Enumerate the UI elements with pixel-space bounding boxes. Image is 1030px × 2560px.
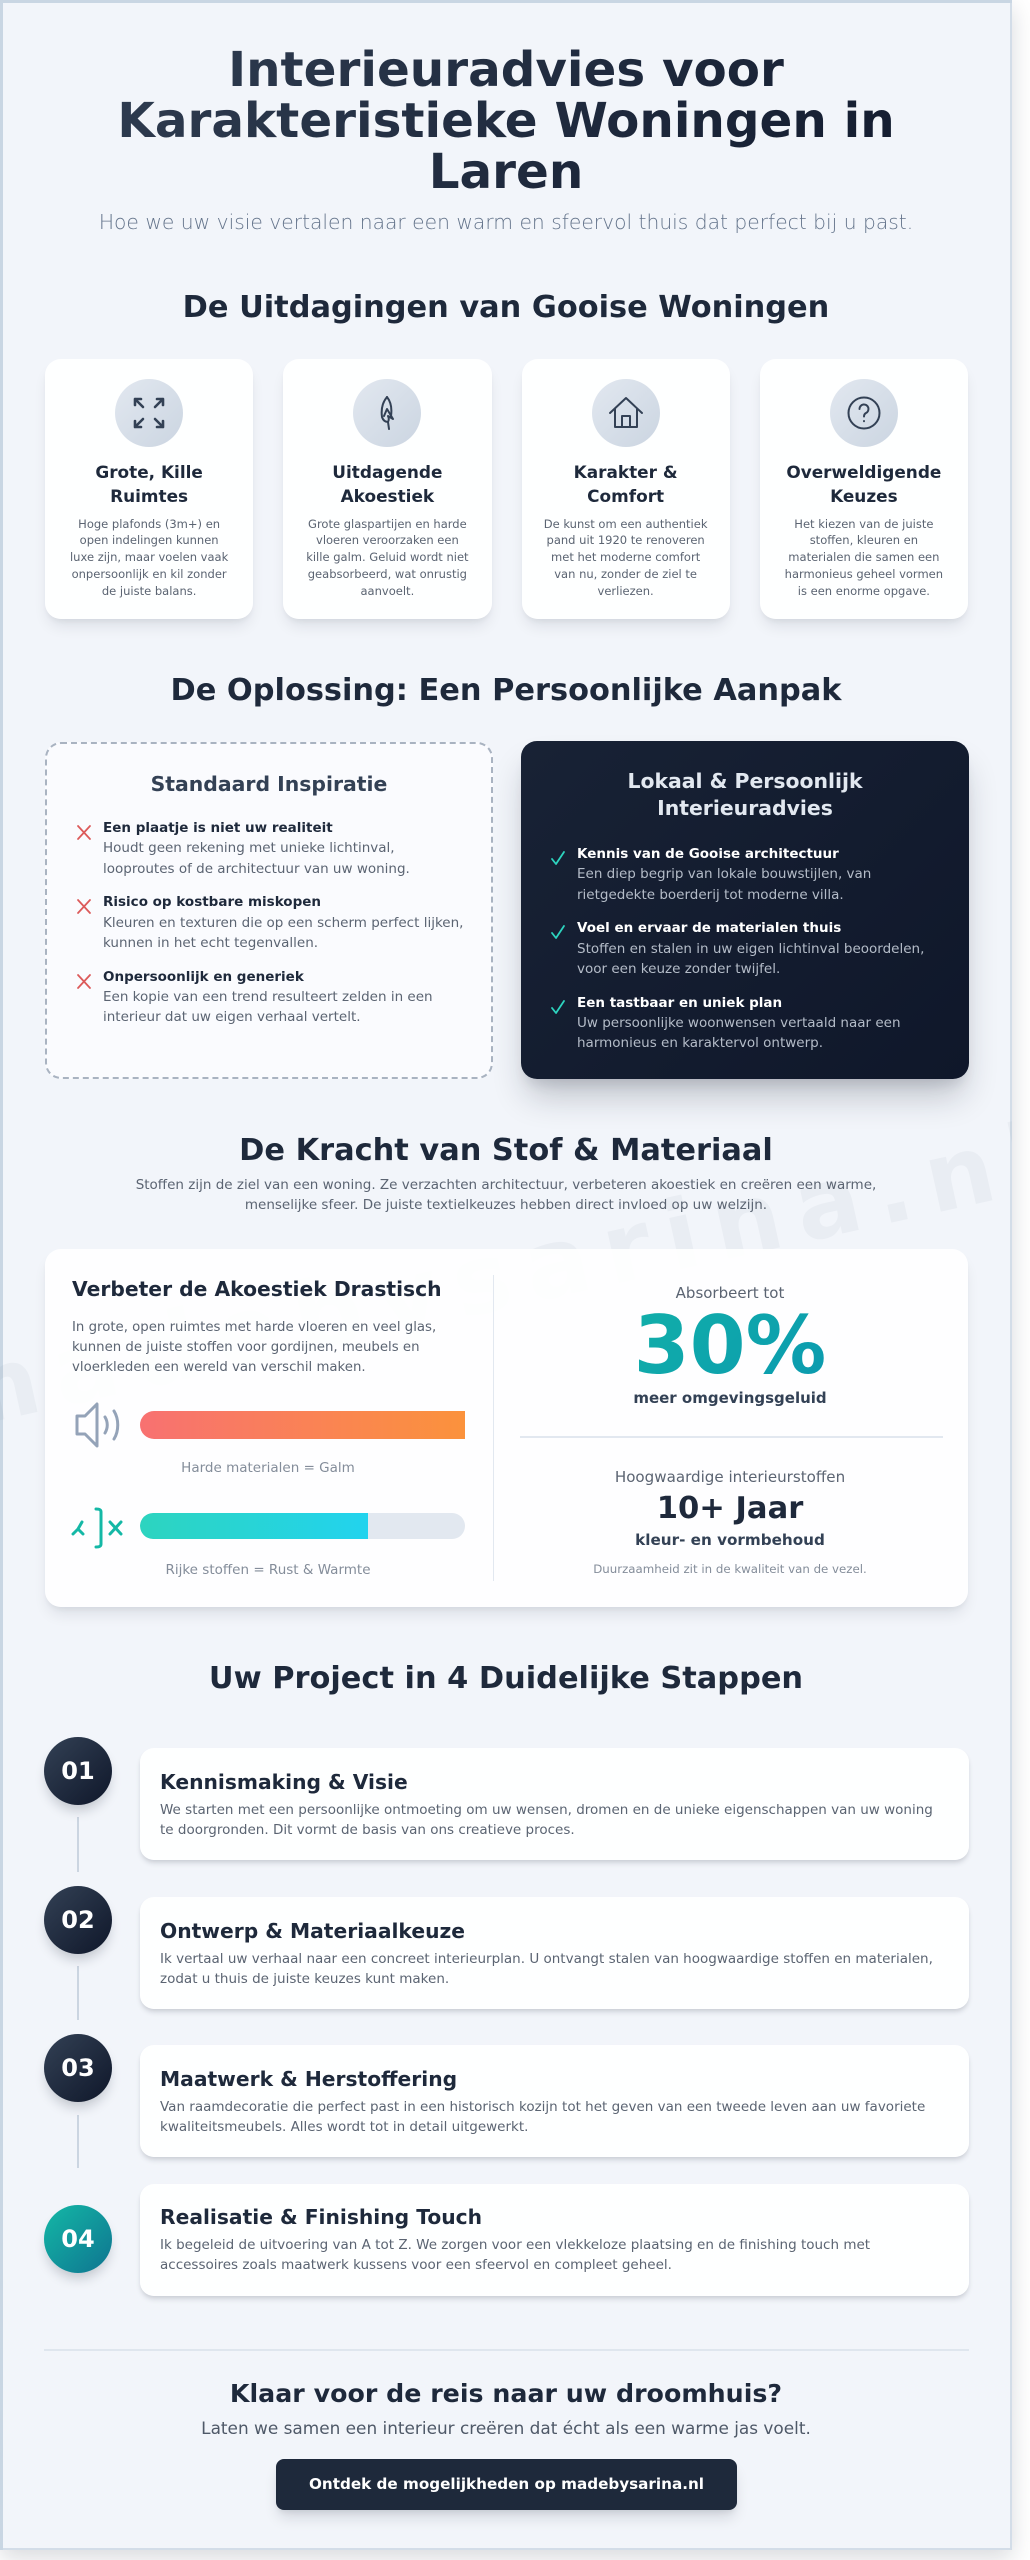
step number: 04 [61,2225,95,2253]
step 4 [42,2184,970,2301]
stat caption: meer omgevingsgeluid [633,1389,827,1407]
panel: akoestiek stats [45,1249,968,1607]
card text [785,516,943,598]
step text: te doorgronden. Dit vormt de basis van ons creatieve proces. [160,1822,575,1838]
step text: Ik begeleid de uitvoering van A tot Z. We zorgen voor een vlekkeloze plaatsing en de finishing touch met [160,2237,870,2253]
list item [551,995,901,1051]
card heading [786,462,941,506]
list item [77,894,463,951]
heading: challenges: De Uitdagingen van Gooise Woningen [183,290,829,325]
card heading [95,462,203,506]
card text: onpersoonlijk en kil zonder [72,567,227,581]
card heading: Uitdagende [332,462,442,482]
step text: zodat u thuis de juiste keuzes kunt maken. [160,1971,449,1987]
card text: kille galm. Geluid wordt niet [306,550,469,564]
block text [72,1320,436,1375]
list item: Stoffen en stalen in uw eigen lichtinval beoordelen, [577,941,924,957]
card text: van nu, zonder de ziel te [554,567,697,581]
icon: sound shape [353,379,421,447]
step number [44,2034,112,2102]
panel: lokaal en persoonlijk [521,741,969,1079]
step text: Van raamdecoratie die perfect past in een historisch kozijn tot het geven van een tweede leven aan uw favoriete [160,2099,925,2115]
step number: 01 [61,1757,95,1785]
panel heading: Interieuradvies [657,796,833,820]
icon: loud speaker [76,1402,120,1448]
panel heading [627,768,863,820]
list item: Kennis van de Gooise architectuur [577,846,839,862]
title: Laren [429,144,583,200]
title: Interieuradvies voor [228,42,784,98]
list item: Onpersoonlijk en generiek [103,969,304,985]
card text [544,516,708,598]
list item: Houdt geen rekening met unieke lichtinval, [103,840,395,856]
card text: de juiste balans. [102,584,196,598]
step title: Maatwerk & Herstoffering [160,2067,457,2091]
card text: aanvoelt. [360,584,414,598]
panel: challenge akoestiek [283,359,492,619]
step card [140,1896,969,2008]
panel heading: Standaard Inspiratie [151,772,387,796]
bar: harde materialen [140,1411,465,1439]
card heading: Grote, Kille [95,462,203,482]
card text: Grote glaspartijen en harde [308,516,467,530]
card text: Het kiezen van de juiste [794,516,933,530]
card text: Hoge plafonds (3m+) en [78,516,220,530]
card heading: Keuzes [830,486,898,506]
card heading: Karakter & [574,462,678,482]
subtitle: Hoe we uw visie vertalen naar een warm en sfeervol thuis dat perfect bij u past. [99,210,913,234]
list item: Uw persoonlijke woonwensen vertaald naar een [577,1015,901,1031]
block text: vloerkleden een wereld van verschil maken. [72,1360,366,1375]
card text: geabsorbeerd, wat onrustig [308,567,467,581]
step card [140,1748,969,1860]
button: Ontdek de mogelijkheden op madebysarina.nl [309,2475,704,2493]
panel: challenge karakter [522,359,730,619]
list item: Een diep begrip van lokale bouwstijlen, van [577,866,871,882]
heading: steps: Uw Project in 4 Duidelijke Stappen [209,1661,803,1696]
list item: kunnen in het echt tegenvallen. [103,935,318,951]
step number [44,1737,112,1805]
step title: Ontwerp & Materiaalkeuze [160,1918,465,1942]
icon: expand arrows [115,379,183,447]
stat number: 10+ Jaar [657,1491,803,1526]
card heading: Overweldigende [786,462,941,482]
horizontal divider [520,1436,943,1438]
card text: open indelingen kunnen [80,533,219,547]
step text: kwaliteitsmeubels. Alles wordt tot in detail uitgewerkt. [160,2119,528,2135]
footer call to action [44,2349,969,2522]
step number: 03 [61,2054,95,2082]
bar: rijke stoffen [140,1513,465,1539]
step text [160,2099,925,2135]
list item: Een tastbaar en uniek plan [577,995,782,1011]
panel: challenge keuzes [760,359,968,619]
list item: harmonieus en karaktervol ontwerp. [577,1035,823,1051]
card text: met het moderne comfort [551,550,700,564]
stat: absorptie [633,1284,827,1407]
step number [44,2205,112,2273]
card heading [332,462,442,506]
list item: rietgedekte boerderij tot moderne villa. [577,887,844,903]
card text: materialen die samen een [788,550,939,564]
list item: Een kopie van een trend resulteert zelden in een [103,989,433,1005]
step text [160,1950,933,1987]
block text: In grote, open ruimtes met harde vloeren en veel glas, [72,1320,436,1335]
card text: stoffen, kleuren en [810,533,918,547]
stat note: Duurzaamheid zit in de kwaliteit van de vezel. [593,1562,867,1576]
vertical divider [492,1275,494,1581]
stat: duurzaamheid [593,1468,867,1576]
step 2 [42,1886,970,2014]
stat label: Hoogwaardige interieurstoffen [615,1468,845,1486]
footer heading: Klaar voor de reis naar uw droomhuis? [230,2379,782,2408]
heading: materials: De Kracht van Stof & Materiaal [239,1133,773,1168]
footer divider [44,2349,969,2351]
card text: De kunst om een authentiek [544,516,708,530]
footer text: Laten we samen een interieur creëren dat écht als een warme jas voelt. [201,2418,811,2438]
list item: looproutes of de architectuur van uw woning. [103,861,410,877]
step number [44,1886,112,1954]
card text: pand uit 1920 te renoveren [547,533,705,547]
stat number [520,1297,940,1393]
list item: Risico op kostbare miskopen [103,894,321,910]
list item [551,846,871,903]
list item [551,920,924,977]
step number: 02 [61,1906,95,1934]
step text: accessoires zoals maatwerk kussens voor een sfeervol en compleet geheel. [160,2257,672,2273]
list item [77,969,433,1025]
block heading: Verbeter de Akoestiek Drastisch [72,1277,442,1301]
icon: muted speaker [71,1508,123,1548]
step text [160,2237,870,2273]
card text [70,516,228,598]
connector line [76,2115,78,2168]
card heading: Ruimtes [110,486,188,506]
list item: Een plaatje is niet uw realiteit [103,820,333,836]
title [0,45,1012,198]
stat number: 30% [634,1298,826,1392]
panel: standaard inspiratie [45,742,493,1079]
list item: voor een keuze zonder twijfel. [577,961,780,977]
card text: verliezen. [598,584,654,598]
bar label: Harde materialen = Galm [181,1460,355,1476]
card text: harmonieus geheel vormen [785,567,943,581]
list item: Kleuren en texturen die op een scherm perfect lijken, [103,915,463,931]
icon: question mark [830,379,898,447]
connector line [76,1817,78,1872]
card heading [574,462,678,506]
step title: Kennismaking & Visie [160,1770,408,1794]
connector line [76,1966,78,2020]
button [276,2459,737,2510]
intro text: Stoffen zijn de ziel van een woning. Ze verzachten architectuur, verbeteren akoestiek en creëren een warme, [136,1177,876,1193]
intro text [136,1177,876,1213]
step text: Ik vertaal uw verhaal naar een concreet interieurplan. U ontvangt stalen van hoogwaardige stoffen en materialen, [160,1950,933,1966]
block text: kunnen de juiste stoffen voor gordijnen, meubels en [72,1340,420,1355]
list item: Voel en ervaar de materialen thuis [577,920,841,936]
card heading: Comfort [587,486,664,506]
heading: solution: De Oplossing: Een Persoonlijke Aanpak [171,673,841,708]
step card [140,2045,969,2157]
step 1 [42,1737,970,1865]
card heading: Akoestiek [341,486,434,506]
card text: is een enorme opgave. [798,584,930,598]
step text: We starten met een persoonlijke ontmoeting om uw wensen, dromen en de unieke eigenschappen van uw woning [160,1802,933,1818]
card text: luxe zijn, maar voelen vaak [70,550,228,564]
panel heading: Lokaal & Persoonlijk [627,768,863,792]
card text: vloeren veroorzaken een [316,533,459,547]
title: Karakteristieke Woningen in [117,93,895,149]
step text [160,1802,933,1838]
step title: Realisatie & Finishing Touch [160,2205,482,2229]
card text [306,516,469,598]
step 3 [42,2034,970,2162]
bar label: Rijke stoffen = Rust & Warmte [165,1562,371,1578]
list item: interieur dat uw eigen verhaal vertelt. [103,1009,361,1025]
panel: challenge grote ruimtes [45,359,253,619]
icon: house [592,379,660,447]
step card [140,2184,969,2296]
stat caption: kleur- en vormbehoud [635,1531,825,1549]
list item [77,820,410,877]
stat label: Absorbeert tot [676,1284,784,1302]
intro text: menselijke sfeer. De juiste textielkeuzes hebben direct invloed op uw welzijn. [245,1197,767,1213]
